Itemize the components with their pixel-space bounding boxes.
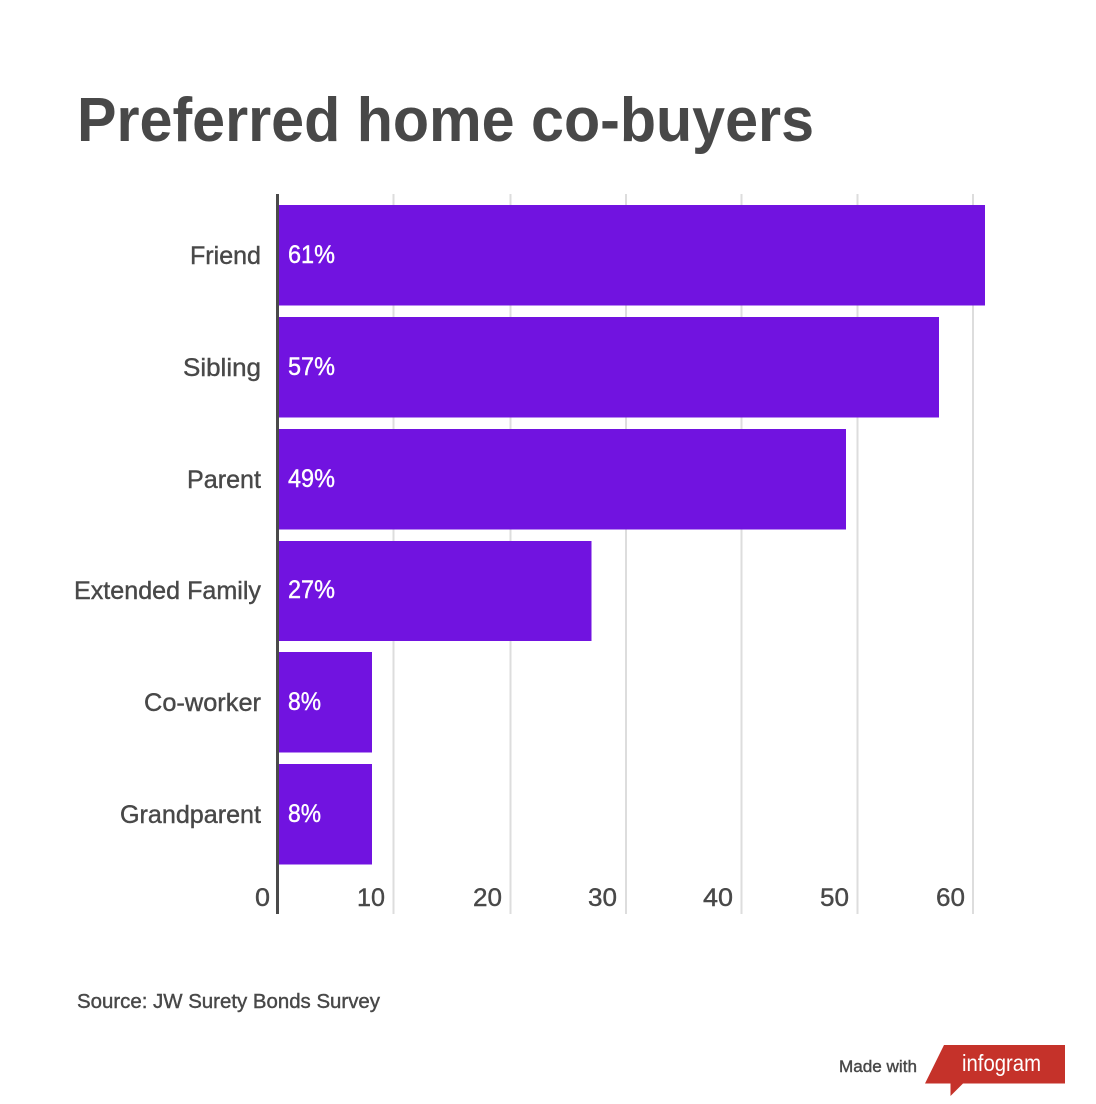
bar: Sibling 57%: 57% <box>288 353 335 381</box>
bar: Extended Family 27%: 27% <box>288 576 335 604</box>
bar: Friend 61%: 61% <box>288 241 335 269</box>
x axis tick labels: 40 <box>703 884 733 912</box>
infogram logo <box>925 1045 1065 1096</box>
category labels: Parent <box>187 466 261 494</box>
source note: Source: JW Surety Bonds Survey <box>77 991 380 1013</box>
bar: Co-worker 8% <box>279 652 372 752</box>
title: Preferred home co-buyers <box>77 86 814 155</box>
bar: Sibling 57% <box>279 317 939 418</box>
category labels: Grandparent <box>120 801 261 829</box>
x axis tick labels: 10 <box>357 884 385 912</box>
bar: Extended Family 27% <box>279 541 592 641</box>
bar: Grandparent 8%: 8% <box>288 800 321 828</box>
category labels: Extended Family <box>74 577 261 605</box>
bar: Co-worker 8%: 8% <box>288 688 321 716</box>
x axis tick labels: 50 <box>820 884 849 912</box>
y axis line <box>276 194 279 914</box>
category labels: Friend <box>190 242 261 270</box>
x axis tick labels: 20 <box>473 884 502 912</box>
category labels: Sibling <box>183 354 261 382</box>
x axis tick labels: 0 <box>255 884 270 912</box>
category labels <box>74 242 261 829</box>
bar chart <box>74 194 985 914</box>
bar: Parent 49%: 49% <box>288 465 335 493</box>
made with label: Made with <box>839 1057 917 1076</box>
x axis tick labels <box>255 884 965 912</box>
bar: Grandparent 8% <box>279 764 372 864</box>
bar: Friend 61% <box>279 205 985 306</box>
x axis tick labels: 30 <box>588 884 617 912</box>
x axis tick labels: 60 <box>936 884 965 912</box>
infogram logo: infogram <box>962 1050 1041 1076</box>
category labels: Co-worker <box>144 689 261 717</box>
bar: Parent 49% <box>279 429 846 530</box>
